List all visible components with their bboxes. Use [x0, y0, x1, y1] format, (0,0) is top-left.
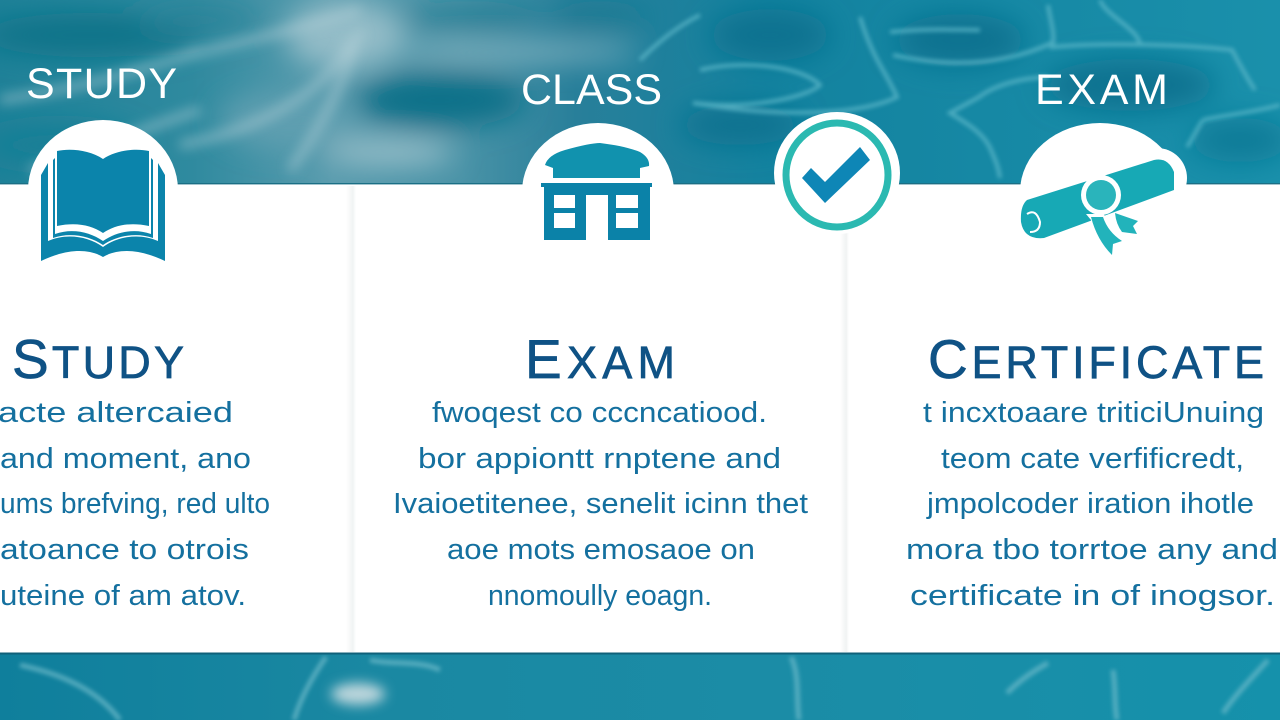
body text: certificate: jmpolcoder iration ihotle — [926, 488, 1254, 520]
body text: study: acte altercaied — [0, 397, 233, 429]
body text: exam: Ivaioetitenee, senelit icinn thet — [393, 488, 808, 520]
top label: exam: EXAM — [1035, 66, 1168, 114]
column: study — [0, 328, 278, 612]
heading: exam: EXAM — [525, 328, 675, 390]
body text: exam: aoe mots emosaoe on — [447, 534, 755, 566]
body text: certificate: certificate in of inogsor. — [910, 580, 1275, 612]
column: certificate — [906, 328, 1280, 612]
icon: school building — [522, 123, 674, 261]
background: water top band — [0, 0, 1280, 186]
body text: exam: nnomoully eoagn. — [488, 580, 712, 612]
body text: study: and moment, ano — [0, 443, 251, 475]
icon: check badge — [774, 112, 900, 234]
top label: class: CLASS — [521, 66, 662, 114]
heading: certificate: CERTIFICATE — [928, 328, 1264, 390]
icon: diploma scroll — [1020, 123, 1187, 261]
body text: study: ums brefving, red ulto — [0, 488, 270, 520]
heading: study: STUDY — [12, 328, 184, 390]
top label: study: STUDY — [26, 60, 177, 108]
column: exam — [393, 328, 816, 612]
body text: study: uteine of am atov. — [0, 580, 246, 612]
body text: certificate: mora tbo torrtoe any and — [906, 534, 1278, 566]
body text: exam: fwoqest co cccncatiood. — [432, 397, 767, 429]
background: water bottom band — [0, 652, 1280, 720]
body text: study: atoance to otrois — [0, 534, 249, 566]
body text: certificate: teom cate verfificredt, — [941, 443, 1244, 475]
icon: open book — [28, 120, 178, 261]
body text: certificate: t incxtoaare triticiUnuing — [923, 397, 1264, 429]
body text: exam: bor appiontt rnptene and — [418, 443, 781, 475]
white panel — [0, 183, 1280, 654]
